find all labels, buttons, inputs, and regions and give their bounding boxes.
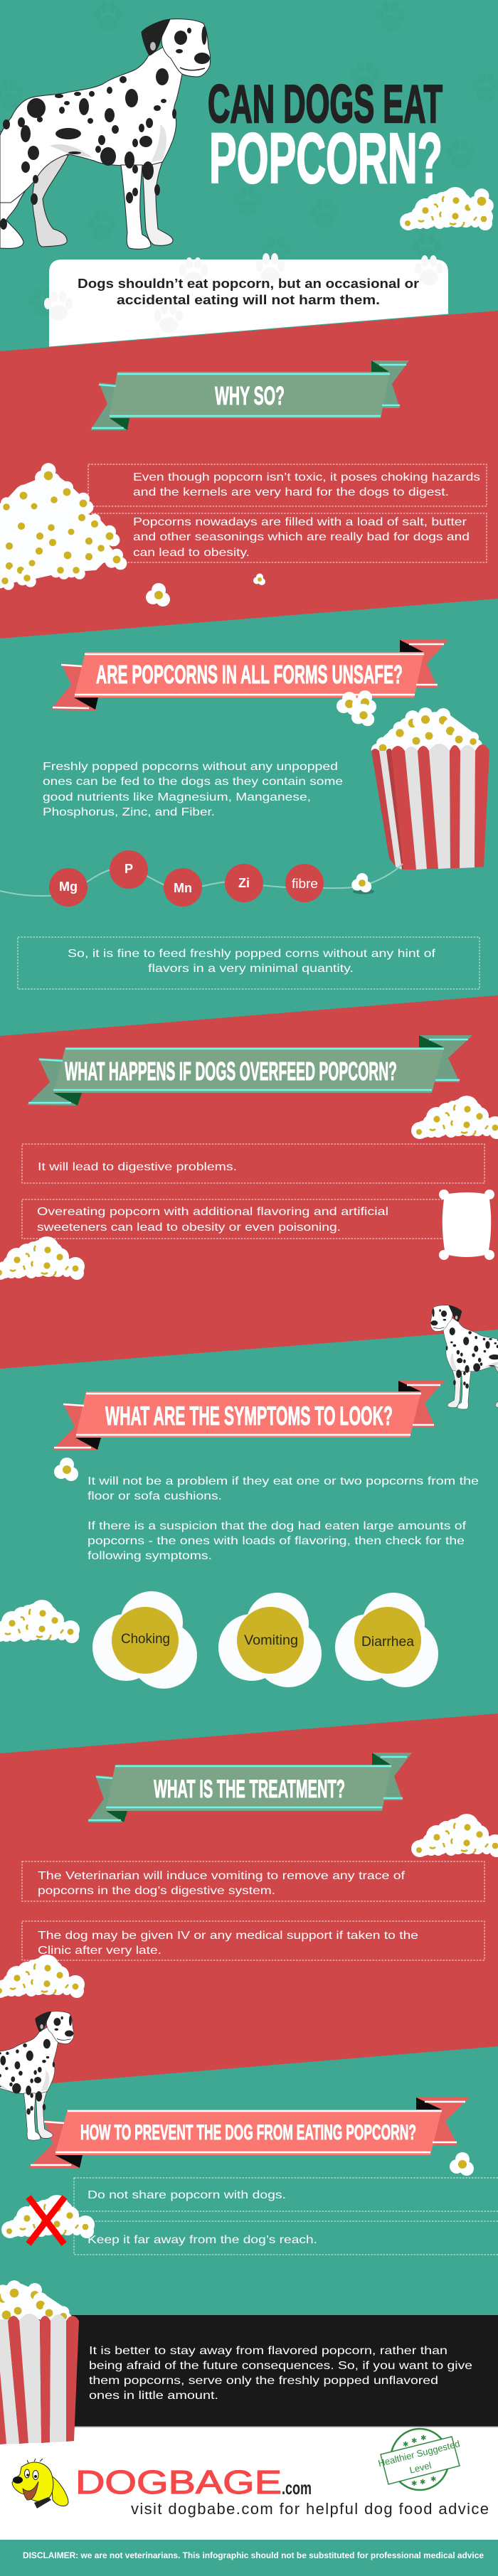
text box: obesity or poisoning xyxy=(22,1199,484,1239)
icon: small dalmatian xyxy=(430,1305,498,1409)
heading ribbon: are popcorns unsafe xyxy=(51,640,448,711)
background paw prints xyxy=(0,1,498,317)
text: conclusion: It is better to stay away from flavored popcorn, rather than xyxy=(89,2345,447,2357)
text box: induce vomiting xyxy=(22,1861,484,1901)
intro card xyxy=(44,253,448,347)
nutrient: Zi xyxy=(225,864,263,902)
heading ribbon: why so xyxy=(90,360,409,430)
text box: seasonings: Popcorns nowadays are filled with a load of salt, butter xyxy=(133,516,467,528)
icon: popcorn cluster left xyxy=(0,1955,85,1998)
text block: nutrients: ones can be fed to the dogs as they contain some xyxy=(43,776,343,788)
icon: popcorn cluster top xyxy=(400,187,494,230)
icon: popcorn on chain xyxy=(351,873,374,894)
text block: symptoms intro xyxy=(88,1475,479,1562)
symptom: vomiting xyxy=(218,1593,322,1687)
text box: do not share xyxy=(74,2178,498,2211)
text box: keep away: Keep it far away from the dog’s reach. xyxy=(88,2234,317,2246)
text box: keep away xyxy=(74,2221,498,2255)
icon: healthier level stamp: ✱ xyxy=(403,2441,408,2449)
nutrient: Mn xyxy=(164,868,202,907)
text box: seasonings: and other seasonings which are really bad for dogs and xyxy=(133,531,470,543)
text box: choking hazard: Even though popcorn isn’t toxic, it poses choking hazards xyxy=(133,471,480,483)
text box: medical support: The dog may be given IV or any medical support if taken to the xyxy=(38,1930,418,1942)
panel: disclaimer footer: DISCLAIMER: we are not veterinarians. This infographic should not be substituted for professional medical advice xyxy=(23,2552,484,2560)
popcorn box bottom xyxy=(0,2280,79,2444)
symptom: choking xyxy=(92,1591,197,1689)
icon: popcorn cluster right xyxy=(411,1814,498,1857)
icon: healthier level stamp: ✱ xyxy=(411,2480,417,2488)
nutrient: P xyxy=(110,850,148,889)
heading ribbon: treatment: WHAT IS THE TREATMENT? xyxy=(154,1775,345,1803)
text block: nutrients xyxy=(43,761,343,818)
logo: wordmark: DOGBAGE xyxy=(75,2464,282,2501)
icon: healthier level stamp: ✱ xyxy=(420,2435,426,2442)
icon: flying popcorn xyxy=(337,690,376,726)
text block: nutrients: Phosphorus, Zinc, and Fiber. xyxy=(43,806,215,818)
title xyxy=(208,74,443,198)
symptom: choking: Choking xyxy=(121,1632,170,1647)
logo: wordmark: .com xyxy=(282,2477,312,2498)
icon: single popcorn xyxy=(146,583,170,606)
nutrient: Zi: Zi xyxy=(238,876,250,890)
icon: single popcorn xyxy=(450,2152,474,2176)
icon: single popcorn xyxy=(54,1458,78,1481)
nutrient: fibre xyxy=(285,864,324,902)
icon: healthier level stamp: ✱ xyxy=(411,2437,417,2445)
text box: do not share: Do not share popcorn with dogs. xyxy=(88,2189,286,2201)
nutrient: Mn: Mn xyxy=(174,881,192,895)
panel: red band what happens xyxy=(0,995,498,1369)
heading ribbon: symptoms xyxy=(53,1381,445,1450)
text box: induce vomiting: popcorns in the dog’s digestive system. xyxy=(38,1885,275,1897)
text box: seasonings xyxy=(88,513,487,562)
icon: popcorn cluster left xyxy=(0,1600,80,1643)
nutrient: Mg xyxy=(49,868,88,907)
icon: popcorn cluster right xyxy=(411,1096,498,1139)
text box: induce vomiting: The Veterinarian will induce vomiting to remove any trace of xyxy=(38,1870,406,1882)
text: visit website: visit dogbabe.com for helpful dog food advice xyxy=(131,2500,489,2518)
panel: white footer xyxy=(0,2427,498,2540)
text: conclusion: them popcorns, serve only the freshly popped unflavored xyxy=(89,2375,438,2387)
text block: symptoms intro: popcorns - the ones with loads of flavoring, then check for the xyxy=(88,1535,465,1547)
logo: dog head xyxy=(12,2459,68,2508)
icon: single popcorn small xyxy=(253,573,265,585)
nutrient chain xyxy=(0,850,403,907)
text block: symptoms intro: following symptoms. xyxy=(88,1550,212,1562)
nutrient: P: P xyxy=(124,862,133,876)
text: conclusion xyxy=(89,2345,472,2402)
text block: symptoms intro: It will not be a problem if they eat one or two popcorns from the xyxy=(88,1475,479,1487)
symptom: diarrhea xyxy=(335,1593,438,1687)
text box: obesity or poisoning: Overeating popcorn with additional flavoring and artificial xyxy=(37,1206,388,1218)
panel: disclaimer footer xyxy=(0,2540,498,2576)
icon: pillow xyxy=(439,1190,494,1260)
text box: digestive problems xyxy=(22,1144,484,1183)
icon: crossed out popcorn xyxy=(1,2195,95,2244)
heading ribbon: treatment xyxy=(88,1753,412,1822)
icon: healthier level stamp xyxy=(377,2429,461,2490)
icon: large dalmatian xyxy=(0,19,211,249)
text: conclusion: being afraid of the future consequences. So, if you want to give xyxy=(89,2360,472,2372)
icon: healthier level stamp: Healthier Suggested xyxy=(377,2438,461,2469)
panel: black conclusion xyxy=(0,2315,498,2427)
heading ribbon: what happens xyxy=(27,1035,472,1106)
text box: medical support xyxy=(22,1921,484,1960)
text block: nutrients: good nutrients like Magnesium, Manganese, xyxy=(43,791,311,803)
text box: feed in minimal quantity: So, it is fine to feed freshly popped corns without any hint of xyxy=(68,948,436,960)
icon: healthier level stamp: Level xyxy=(408,2460,433,2476)
text box: digestive problems: It will lead to digestive problems. xyxy=(38,1161,237,1173)
text block: nutrients: Freshly popped popcorns without any unpopped xyxy=(43,761,338,773)
text box: feed in minimal quantity: flavors in a very minimal quantity. xyxy=(148,963,354,975)
icon: healthier level stamp: ✱ xyxy=(420,2479,425,2486)
text box: seasonings: can lead to obesity. xyxy=(133,547,250,559)
nutrient: Mg: Mg xyxy=(59,880,78,894)
text box: choking hazard xyxy=(88,464,487,506)
panel: red band why so xyxy=(0,311,498,638)
symptom: diarrhea: Diarrhea xyxy=(361,1635,414,1650)
icon: dalmatian bottom left xyxy=(0,2011,74,2140)
heading ribbon: why so: WHY SO? xyxy=(215,381,285,410)
heading ribbon: prevent xyxy=(28,2097,470,2168)
text block: symptoms intro: If there is a suspicion that the dog had eaten large amounts of xyxy=(88,1520,467,1532)
text box: choking hazard: and the kernels are very hard for the dogs to digest. xyxy=(133,486,449,498)
icon: popcorn cluster left xyxy=(0,1236,85,1280)
intro card: Dogs shouldn’t eat popcorn, but an occasional or xyxy=(78,277,419,291)
text box: medical support: Clinic after very late. xyxy=(38,1945,161,1957)
intro card: accidental eating will not harm them. xyxy=(117,293,380,307)
nutrient: fibre: fibre xyxy=(292,877,318,891)
icon: healthier level stamp: ✱ xyxy=(430,2476,436,2484)
text block: symptoms intro: floor or sofa cushions. xyxy=(88,1490,222,1502)
panel: red band treatment xyxy=(0,1714,498,2088)
symptom: vomiting: Vomiting xyxy=(244,1633,298,1648)
text box: obesity or poisoning: sweeteners can lead to obesity or even poisoning. xyxy=(37,1222,341,1234)
icon: popcorn pile xyxy=(0,463,127,590)
text box: feed in minimal quantity xyxy=(18,937,480,989)
text: conclusion: ones in little amount. xyxy=(89,2390,218,2402)
popcorn box xyxy=(371,707,489,870)
